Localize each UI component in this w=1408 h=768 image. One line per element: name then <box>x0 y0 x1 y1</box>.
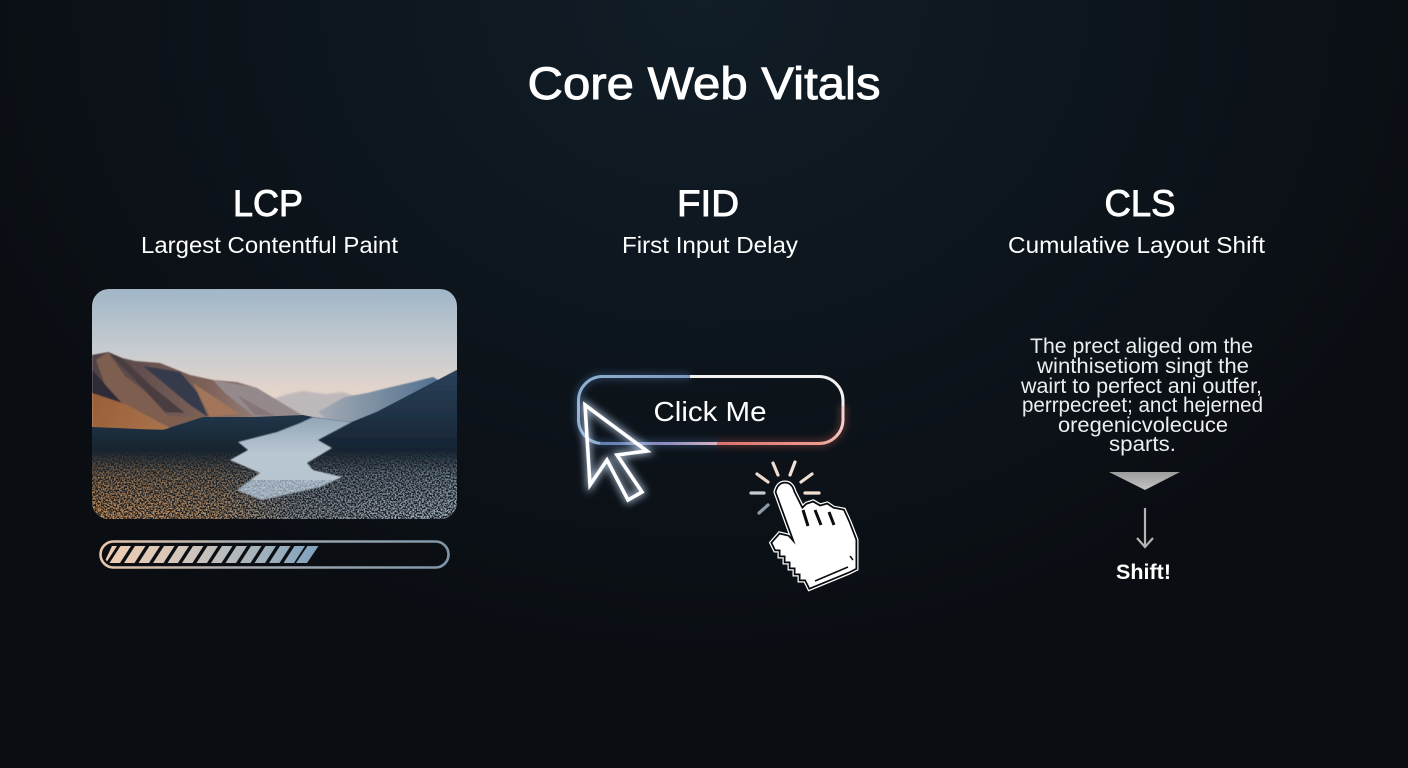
icon: down arrow <box>1137 508 1153 547</box>
lake <box>230 417 352 500</box>
panel: CLS <box>1008 183 1266 584</box>
text block: winthisetiom singt the <box>1036 355 1249 378</box>
label: Shift!: Shift! <box>1116 561 1171 584</box>
subtitle: First Input Delay: First Input Delay <box>622 232 799 258</box>
heading: CLS: CLS <box>1104 183 1176 224</box>
text block: The prect aliged om the <box>1030 335 1253 358</box>
text block: oregenicvolecuce <box>1058 414 1228 437</box>
heading: LCP: LCP <box>233 183 303 224</box>
icon: hand pointer <box>773 484 855 587</box>
heading: FID: FID <box>677 183 739 224</box>
panel: FID <box>578 183 855 587</box>
text block: wairt to perfect ani outfer, <box>1020 375 1262 398</box>
panel: LCP <box>92 183 457 568</box>
icon: click sparks <box>751 462 819 513</box>
icon: triangle <box>1109 472 1180 490</box>
subtitle: Largest Contentful Paint: Largest Contentful Paint <box>141 232 399 258</box>
icon: arrow cursor <box>585 405 647 500</box>
landscape photo <box>92 289 457 520</box>
subtitle: Cumulative Layout Shift: Cumulative Layout Shift <box>1008 232 1266 258</box>
button: Click Me <box>578 376 843 444</box>
button: Click Me: Click Me <box>654 396 766 427</box>
text block <box>1020 335 1263 456</box>
progress bar <box>100 542 448 568</box>
dithered foreground <box>92 452 457 519</box>
text block: perrpecreet; anct hejerned <box>1022 394 1263 417</box>
text block: sparts. <box>1109 433 1176 456</box>
title: Core Web Vitals <box>528 58 880 109</box>
